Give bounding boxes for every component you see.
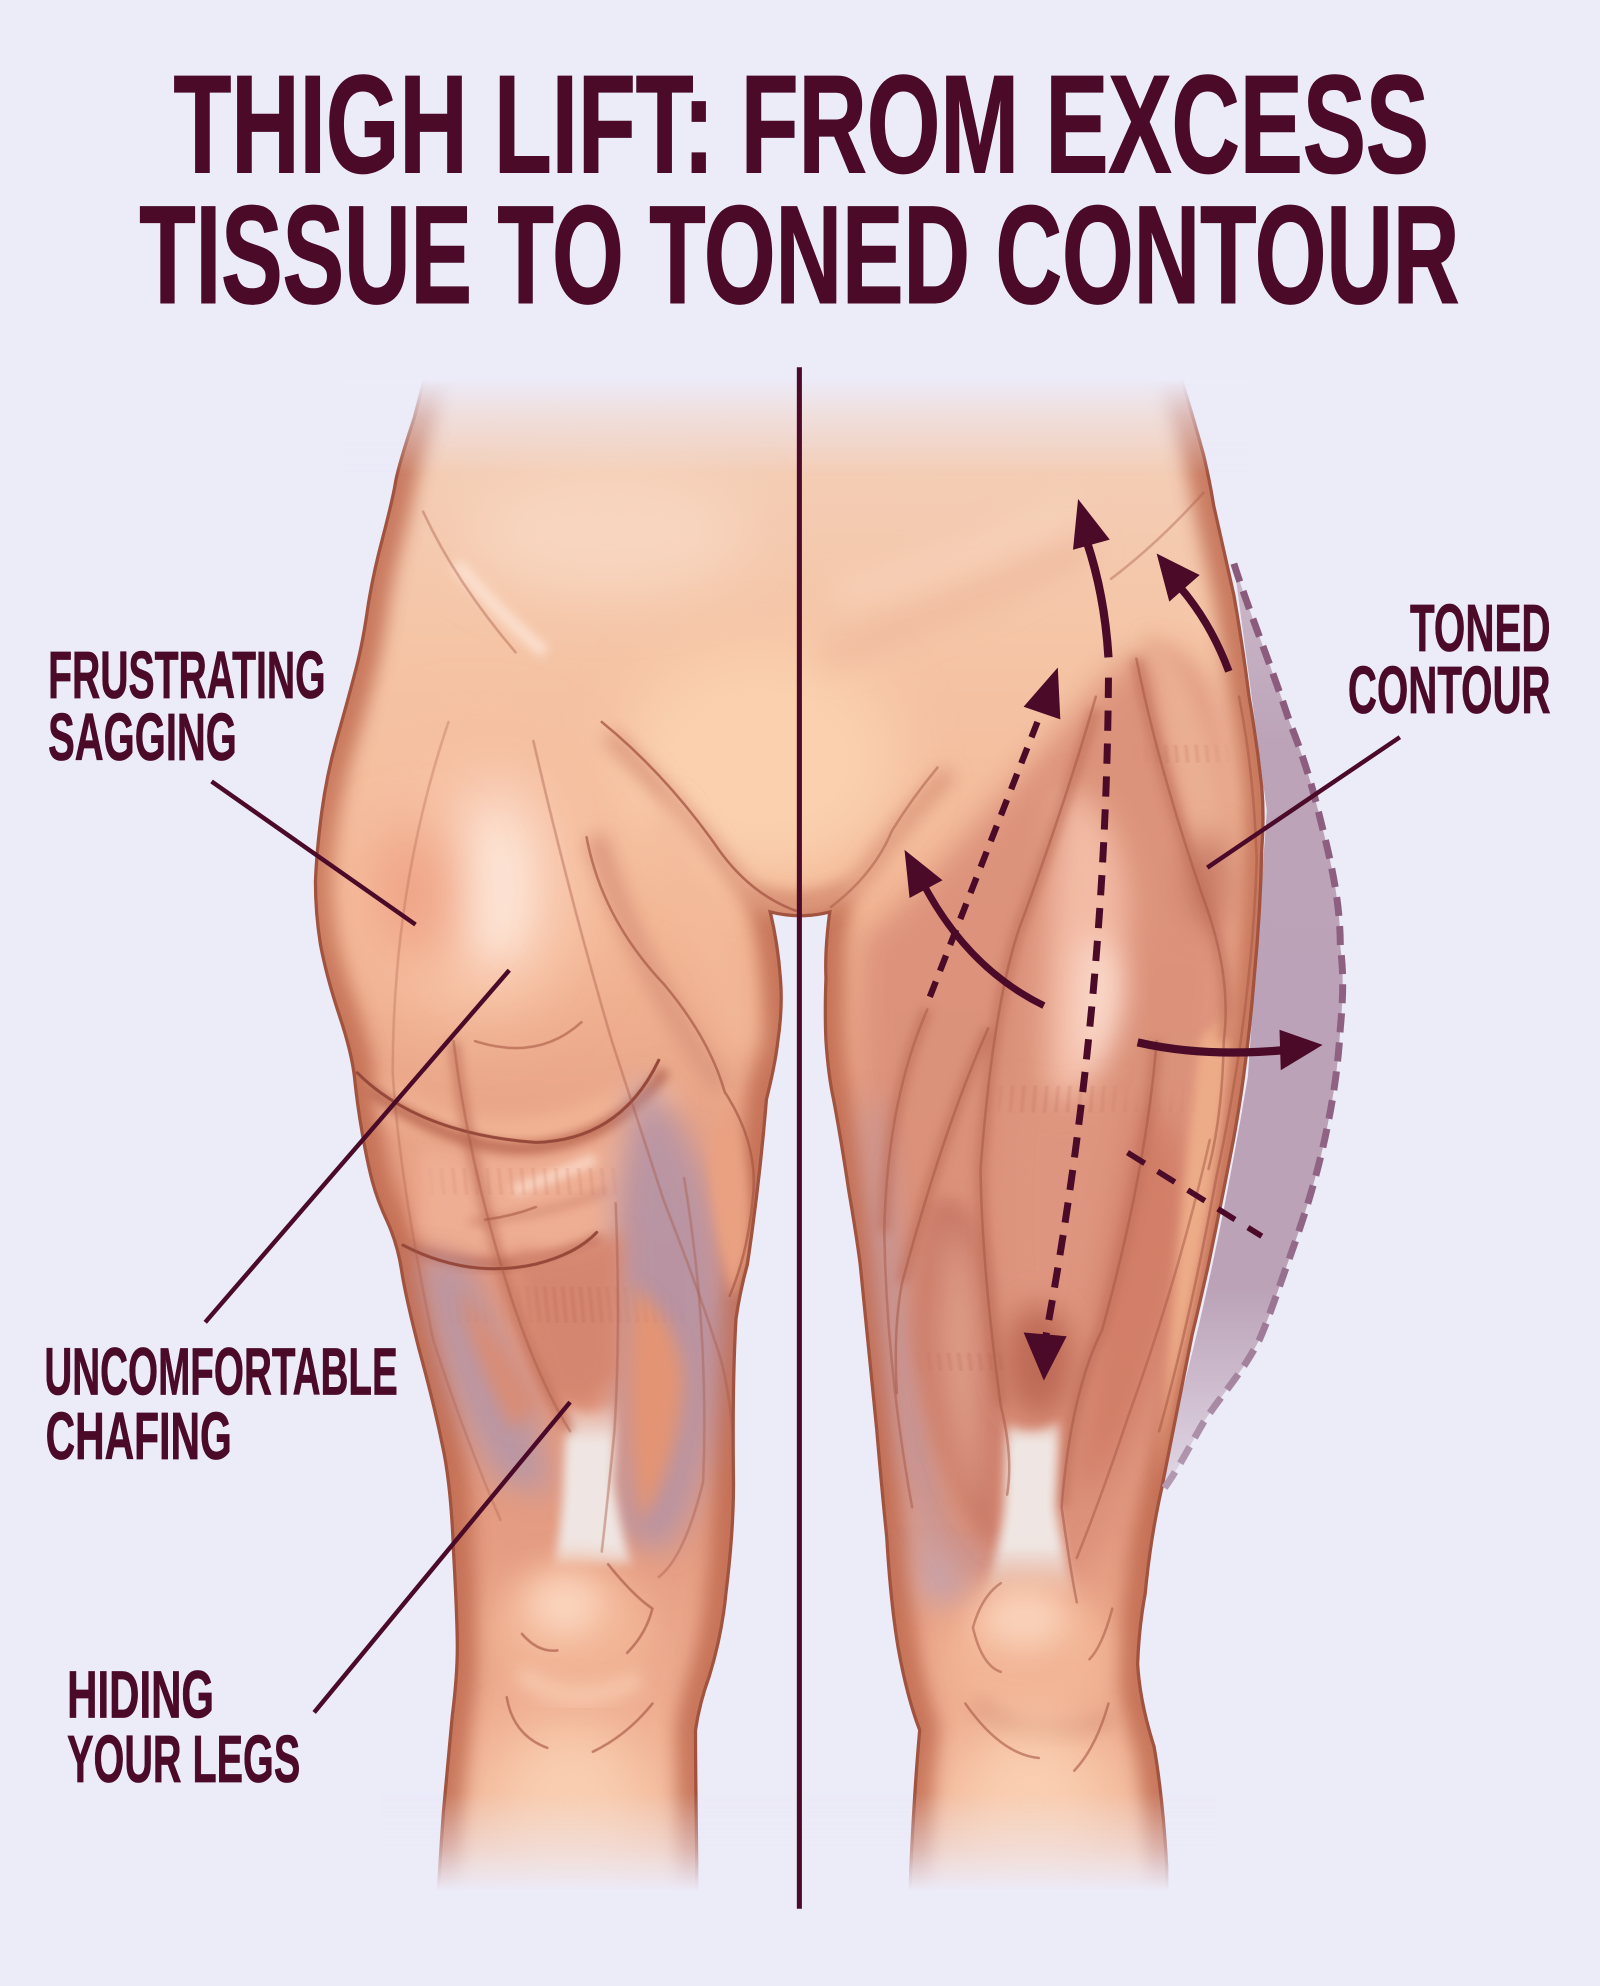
label: uncomfortable chafing: UNCOMFORTABLE: [44, 1335, 398, 1410]
body outline: [315, 355, 1263, 1913]
ghost shape: removed excess tissue: [1153, 564, 1343, 1495]
label: frustrating sagging: FRUSTRATING: [48, 638, 326, 713]
arrow: outer hip lift: [1157, 553, 1229, 671]
torso crotch shadow: [608, 735, 950, 906]
skin base: [315, 355, 1263, 1913]
arrow: upper centre lift: [1073, 499, 1110, 657]
arrow: dashed diagonal: [930, 667, 1060, 997]
torso soft light: [621, 646, 899, 874]
arrow: outward contour: [1138, 1030, 1323, 1070]
arrow: inner thigh lift: [905, 850, 1044, 1006]
right tendon and knee: [983, 1421, 1074, 1598]
arrows: lift vectors: [905, 499, 1323, 1381]
muscle fibres: [431, 747, 1229, 1368]
arrow: dashed centre vertical: [1024, 678, 1108, 1381]
dashed short line: [1127, 1153, 1262, 1236]
left tendon and knee: [555, 1398, 631, 1564]
fade overlays: [342, 342, 1254, 1919]
label: uncomfortable chafing: [44, 970, 509, 1474]
label: hiding your legs: [67, 1402, 570, 1797]
title: [139, 46, 1459, 333]
label: toned contour: [1207, 591, 1551, 868]
edge shadow: [315, 355, 1263, 1913]
left lower muscles and fascia: [616, 1077, 723, 1552]
label: frustrating sagging: [48, 638, 416, 925]
creases: [357, 493, 1257, 1771]
label: hiding your legs: HIDING: [67, 1657, 214, 1732]
label: uncomfortable chafing: CHAFING: [46, 1399, 232, 1474]
left sag lobe: [318, 792, 584, 1028]
anatomy illustration: thighs: [315, 355, 1263, 1913]
label: frustrating sagging: SAGGING: [48, 700, 237, 775]
right leg muscle mass: [857, 650, 1233, 1577]
shading and muscles: [315, 355, 1263, 1913]
muscle boundary shadows: [454, 659, 1226, 1507]
ghost shape dashed outline: [1164, 564, 1343, 1488]
label: hiding your legs: YOUR LEGS: [67, 1722, 300, 1797]
centre divider line: [797, 367, 801, 1909]
left hanging folds: [374, 1085, 666, 1140]
